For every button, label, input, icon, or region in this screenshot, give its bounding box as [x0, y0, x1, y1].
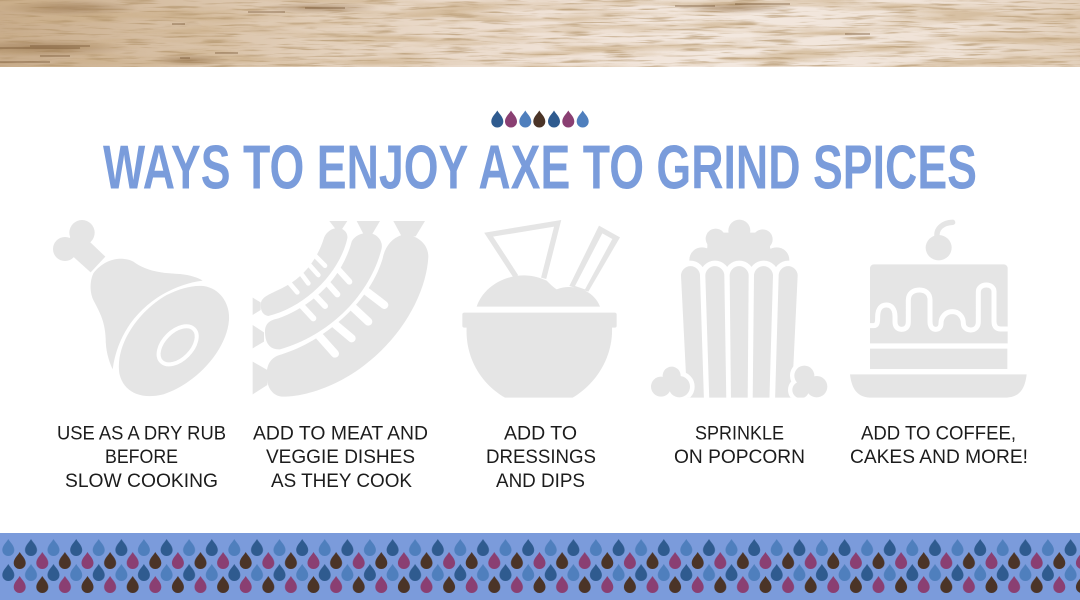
label: dry rub: BEFORE — [105, 447, 178, 468]
popcorn kernels left — [651, 367, 690, 397]
label: dry rub: USE AS A DRY RUB — [57, 424, 226, 444]
label: dry rub — [57, 424, 226, 492]
label: dressings and dips: ADD TO — [504, 424, 577, 444]
popcorn box stripes — [681, 266, 798, 402]
footer band with spice drop pattern — [0, 533, 1080, 600]
label: meat and veggie dishes: VEGGIE DISHES — [266, 447, 415, 468]
decorative row of seven spice drops — [491, 110, 589, 128]
label: meat and veggie dishes: ADD TO MEAT AND — [253, 424, 428, 444]
label: popcorn: SPRINKLE — [695, 424, 784, 444]
label: dry rub: SLOW COOKING — [65, 471, 218, 492]
label: coffee and cakes — [850, 424, 1028, 468]
icon: ham — [53, 220, 229, 396]
medium sausage — [253, 221, 382, 349]
label: dressings and dips — [486, 424, 596, 492]
wood texture header banner — [0, 0, 1080, 67]
icon: popcorn box — [651, 220, 827, 402]
label: dressings and dips: AND DIPS — [496, 471, 585, 492]
label: popcorn: ON POPCORN — [674, 447, 805, 468]
label: dressings and dips: DRESSINGS — [486, 447, 596, 468]
label: popcorn — [674, 424, 805, 468]
icon: cake with cherry — [850, 222, 1027, 398]
popcorn kernels right — [792, 366, 827, 398]
icon: sausages — [253, 221, 428, 397]
large sausage — [253, 221, 428, 397]
popcorn heap — [690, 220, 790, 267]
label: meat and veggie dishes — [253, 424, 428, 492]
label: meat and veggie dishes: AS THEY COOK — [271, 471, 412, 492]
label: coffee and cakes: CAKES AND MORE! — [850, 447, 1028, 468]
small sausage — [253, 221, 347, 316]
label: coffee and cakes: ADD TO COFFEE, — [861, 424, 1016, 444]
icon: bowl with chip and stick — [462, 223, 620, 398]
